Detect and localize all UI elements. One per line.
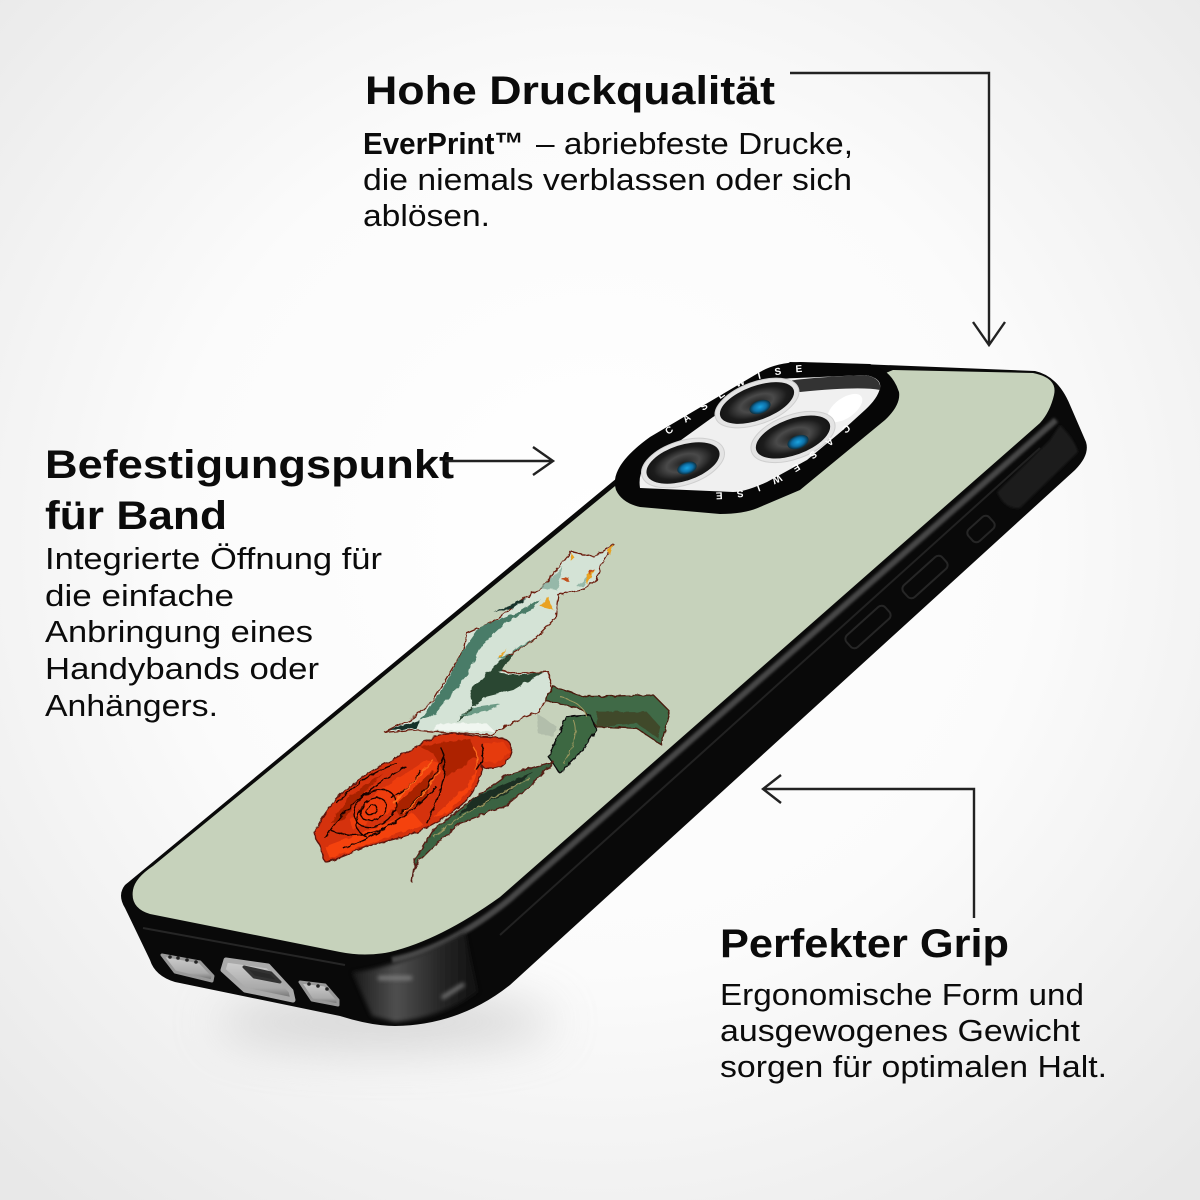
- artwork: wolf and rose: [315, 544, 670, 882]
- lens left pupil: [676, 459, 698, 477]
- lens left: [635, 429, 731, 497]
- callout: grip: [720, 922, 1107, 1084]
- speaker holes right: [307, 982, 329, 991]
- heading: strap point: [45, 443, 454, 538]
- leaves: [412, 687, 670, 882]
- camera bump: [615, 362, 900, 514]
- bottom side line: [143, 928, 345, 965]
- top right grip: [997, 425, 1078, 508]
- body: strap point: Anhängers.: [45, 688, 218, 723]
- body: strap point: Anbringung eines: [45, 614, 313, 649]
- case body: [121, 362, 1087, 1026]
- rose: [315, 733, 512, 862]
- lens top pupil: [747, 397, 773, 417]
- bottom corner highlights: [378, 978, 464, 998]
- body: print quality: – abriebfeste Drucke,: [536, 126, 853, 161]
- opening top shadow: [770, 375, 880, 392]
- phone case: [121, 362, 1087, 1026]
- body: print quality: ablösen.: [363, 198, 490, 233]
- speaker holes left: [168, 955, 198, 964]
- side bevel highlight: [392, 420, 1056, 960]
- body: print quality: EverPrint™: [363, 126, 524, 161]
- grip side lines: [500, 448, 1040, 935]
- body: grip: [720, 977, 1107, 1084]
- body: strap point: Handybands oder: [45, 651, 319, 686]
- body: grip: sorgen für optimalen Halt.: [720, 1049, 1107, 1084]
- lens right pupil: [785, 432, 811, 452]
- heading: print quality: Hohe Druckqualität: [365, 69, 775, 113]
- speaker left: [162, 955, 213, 981]
- brand text bottom: CASEWISE: [716, 426, 850, 500]
- body: strap point: [45, 541, 382, 723]
- lens right: [744, 401, 842, 473]
- heading: strap point: für Band: [45, 494, 227, 538]
- callout: strap point: [45, 443, 454, 723]
- body: grip: Ergonomische Form und: [720, 977, 1084, 1012]
- side buttons: [843, 514, 997, 650]
- charging port: [223, 960, 293, 1000]
- arrow: print quality: [790, 73, 1005, 345]
- bump opening: [640, 375, 880, 492]
- callout: print quality: [363, 69, 853, 233]
- charging port opening: [244, 967, 280, 982]
- arrow: grip: [763, 775, 974, 918]
- corner shine: [352, 932, 478, 1022]
- body: strap point: Integrierte Öffnung für: [45, 541, 382, 576]
- brand text top: CASEWISE: [666, 365, 802, 434]
- body: strap point: die einfache: [45, 578, 234, 613]
- bottom ports: [162, 955, 338, 1005]
- flash: [823, 388, 867, 428]
- body: print quality: die niemals verblassen oder sich: [363, 162, 852, 197]
- heading: strap point: Befestigungspunkt: [45, 443, 454, 487]
- speaker right: [300, 982, 338, 1005]
- body: print quality: [363, 126, 853, 233]
- body: grip: ausgewogenes Gewicht: [720, 1013, 1080, 1048]
- phone shadow: [215, 996, 555, 1048]
- back plate: [133, 370, 1055, 954]
- lens top: [708, 368, 806, 438]
- wolf body: [385, 544, 613, 735]
- heading: grip: Perfekter Grip: [720, 922, 1009, 966]
- bump frame: [615, 362, 899, 514]
- arrow: strap point: [445, 447, 553, 475]
